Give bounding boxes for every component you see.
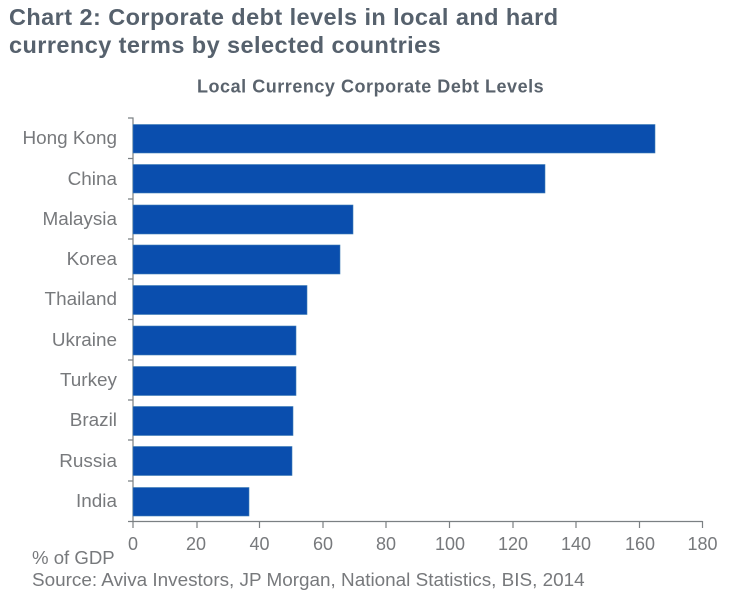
x axis labels: 100 [435,534,465,554]
x axis labels: 140 [561,534,591,554]
country labels: Ukraine [52,330,117,351]
country labels: Brazil [70,410,117,431]
source note: Source: Aviva Investors, JP Morgan, National Statistics, BIS, 2014 [32,570,585,591]
x axis labels: 160 [625,534,655,554]
title: Chart 2: Corporate debt levels in local and hard [9,4,559,30]
x axis labels: 40 [249,534,270,554]
country labels: Russia [59,451,117,472]
title: currency terms by selected countries [9,32,441,58]
x axis labels: 20 [186,534,206,554]
country labels: Korea [67,249,117,270]
y unit note: % of GDP [32,547,115,568]
x axis labels: 80 [376,534,396,554]
axes [128,118,702,528]
x axis labels: 180 [687,534,718,554]
x axis labels [128,534,718,554]
x axis labels: 120 [498,534,528,554]
country labels: Malaysia [42,209,117,230]
x axis labels: 60 [313,534,333,554]
bar chart [22,118,718,554]
country labels: India [76,491,117,512]
title [9,4,559,58]
country labels: Thailand [45,289,117,310]
bars [133,124,655,516]
chart heading: Local Currency Corporate Debt Levels [197,76,544,96]
country labels [22,128,118,512]
country labels: Turkey [60,370,118,391]
country labels: Hong Kong [22,128,117,149]
x axis labels: 0 [128,534,138,554]
country labels: China [68,169,117,190]
